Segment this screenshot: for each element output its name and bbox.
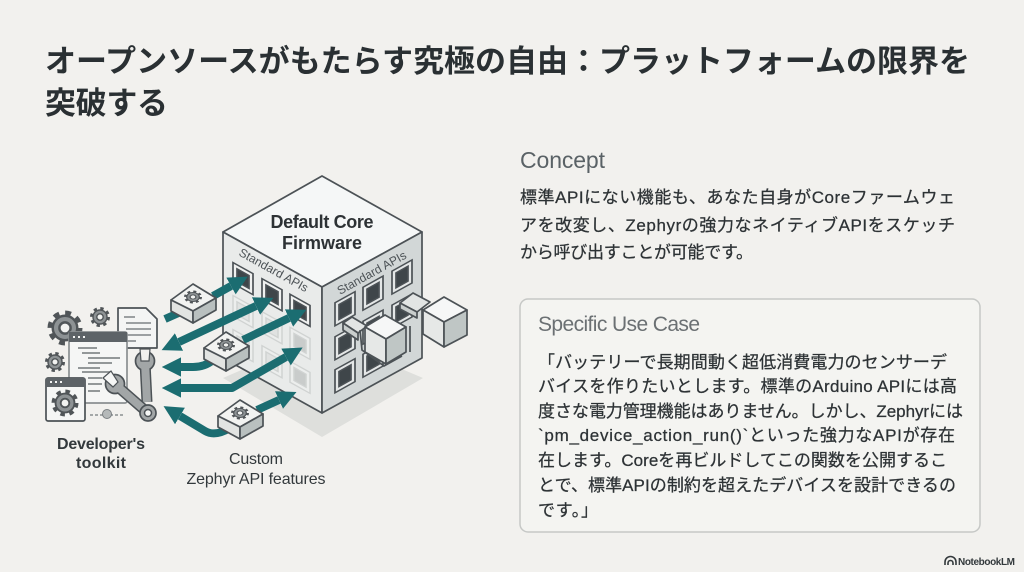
watermark: NotebookLM: NotebookLM <box>958 557 1015 568</box>
cube: default core firmware <box>223 176 422 413</box>
right face API sockets <box>335 260 412 393</box>
cube label: Default Core <box>270 212 374 232</box>
icon: slider knob <box>90 410 125 418</box>
label: custom Zephyr API features <box>186 451 326 488</box>
use case body text: 「バッテリーで長期間動く超低消費電力のセンサーデ <box>538 352 947 372</box>
label: developer's toolkit: toolkit <box>76 455 127 472</box>
plug-in cubes on right face <box>343 293 467 366</box>
concept body text: から呼び出すことが可能です。 <box>520 243 753 262</box>
title: オープンソースがもたらす究極の自由：プラットフォームの限界を <box>45 44 970 79</box>
concept body text: アを改変し、Zephyrの強力なネイティブAPIをスケッチ <box>520 215 955 235</box>
icon: NotebookLM logo <box>945 556 956 565</box>
heading: specific use case: Specific Use Case <box>538 313 700 336</box>
panel: firmware cube diagram <box>46 176 467 488</box>
label: custom Zephyr API features: Zephyr API features <box>186 471 326 488</box>
label: developer's toolkit: Developer's <box>57 436 145 453</box>
label: developer's toolkit <box>57 436 145 472</box>
use case body text: 在します。Coreを再ビルドしてこの関数を公開するこ <box>538 451 947 470</box>
card <box>520 299 980 532</box>
icon: settings window <box>46 378 85 421</box>
use case body text: とで、標準APIの制約を超えたデバイスを設計できるの <box>538 475 956 495</box>
use case body text: 度さな電力管理機能はありません。しかし、Zephyrには <box>538 402 963 421</box>
use case body text: `pm_device_action_run()`といった強力なAPIが存在 <box>538 426 955 445</box>
title <box>45 44 970 121</box>
cube label: Firmware <box>282 233 362 253</box>
label: custom Zephyr API features: Custom <box>229 451 283 468</box>
concept body text <box>520 188 955 262</box>
title: 突破する <box>45 86 168 121</box>
left face API sockets <box>233 263 310 393</box>
use case body text: です。」 <box>538 501 598 520</box>
arrows: API calls <box>165 286 289 433</box>
icon: developer's toolkit <box>46 308 157 421</box>
heading: concept: Concept <box>520 147 606 173</box>
icon: large gear <box>50 313 80 343</box>
concept body text: 標準APIにない機能も、あなた自身がCoreファームウェ <box>520 188 955 207</box>
use case body text <box>538 352 963 520</box>
icon: wrenches <box>103 349 156 421</box>
panel: concept <box>520 147 955 262</box>
panel: specific use case <box>520 299 980 532</box>
modules: custom Zephyr API features <box>171 284 263 439</box>
cube label <box>270 212 374 253</box>
label: standard APIs right: Standard APIs <box>335 248 409 298</box>
use case body text: バイスを作りたいとします。標準のArduino APIには高 <box>538 377 957 396</box>
cube shadow <box>223 362 423 437</box>
icon: code window <box>69 332 127 403</box>
icon: document <box>118 308 157 348</box>
label: standard APIs left: Standard APIs <box>237 245 311 295</box>
icon: gear <box>46 354 64 370</box>
icon: small gear <box>92 308 108 326</box>
